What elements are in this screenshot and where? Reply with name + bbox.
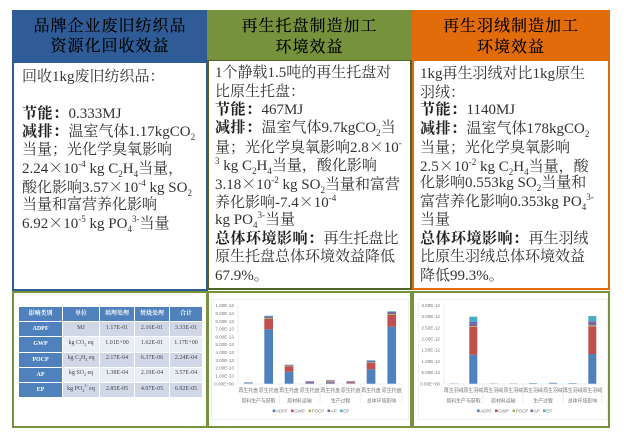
heading: recycled down [412, 10, 610, 60]
chart: recycled pallet stacked bars: 总体环境影响 [367, 398, 396, 404]
table: impact categories: kg C2H4 eq [67, 355, 95, 362]
chart: recycled down stacked bars: 再生羽绒 [563, 387, 583, 394]
chart: recycled down stacked bars: 原料生产与获取 [446, 398, 481, 404]
table: impact categories: MJ [77, 325, 85, 331]
table: impact categories: 6.92E-05 [175, 386, 197, 392]
chart: recycled pallet stacked bars: 再生托盘 [279, 387, 299, 394]
text block: recycled down figures: 节能：1140MJ [420, 102, 515, 118]
text block: textile recycling figures: 回收1kg废旧纺织品： [22, 69, 165, 85]
panel: recycled down benefits [412, 10, 610, 290]
text block: textile recycling figures: 6.92×10-5 kg PO43-当量 [22, 212, 169, 234]
text block: recycled pallet figures: kg PO43-当量 [215, 210, 295, 230]
chart: recycled down stacked bars: 原材料运输 [491, 398, 516, 404]
table: impact categories [19, 307, 202, 397]
chart: recycled down stacked bars: ADPF [480, 408, 492, 414]
table: impact categories: 单位 [75, 311, 87, 317]
text block: recycled down figures [412, 60, 610, 290]
chart: recycled pallet stacked bars: 6.00E-13 [215, 334, 234, 340]
chart: recycled pallet stacked bars: 2.00E-13 [215, 366, 234, 370]
table: impact categories: 2.85E-05 [106, 386, 128, 392]
heading: recycled down: 环境效益 [477, 39, 545, 56]
text block: recycled pallet figures: 节能：467MJ [215, 102, 303, 118]
text block: textile recycling figures [12, 62, 208, 291]
chart: recycled pallet stacked bars: 8.00E-13 [215, 319, 234, 324]
chart: recycled down stacked bars: GWP [498, 408, 509, 414]
text block: recycled down figures: 1kg再生羽绒对比1kg原生 [420, 66, 585, 82]
text block: textile recycling figures: 减排：温室气体1.17kgCO2 [22, 124, 195, 142]
chart: recycled down stacked bars: 3.00E-12 [421, 314, 440, 319]
text block: recycled pallet figures: 3 kg C2H4当量，酸化影响 [215, 156, 377, 176]
table: impact categories: 1.38E-04 [106, 370, 128, 376]
chart: recycled pallet stacked bars: 原材料运输 [287, 398, 312, 404]
panel: impact table frame [12, 291, 208, 428]
text block: textile recycling figures: 当量；光化学臭氧影响 [22, 142, 172, 158]
text block: recycled pallet figures: 总体环境影响：再生托盘比 [215, 231, 399, 247]
text block: recycled pallet figures: 减排：温室气体9.7kgCO2当 [215, 120, 396, 138]
table: impact categories: kg SO2 eq [69, 370, 93, 378]
chart: recycled down stacked bars: 再生羽绒 [444, 387, 464, 394]
table: impact categories: 1.17E+00 [174, 340, 198, 346]
text block: textile recycling figures: 酸化影响3.57×10-4 kg SO2 [22, 176, 192, 198]
text block: recycled down figures: 富营养化影响0.353kg PO43- [420, 192, 594, 212]
table: impact categories: 1.17E-01 [106, 325, 128, 331]
table: impact categories: 1.62E-01 [141, 340, 163, 346]
chart: recycled pallet stacked bars: 原料生产与获取 [241, 398, 276, 404]
text block: recycled down figures: 减排：温室气体178kgCO2 [420, 121, 589, 139]
heading: recycled down: 再生羽绒制造加工 [443, 18, 579, 35]
chart: recycled down stacked bars: 1.50E-12 [421, 348, 440, 353]
chart: recycled pallet stacked bars: 再生托盘 [239, 387, 258, 394]
chart: recycled down stacked bars: 原生羽绒 [464, 387, 483, 394]
chart: recycled down stacked bars: 原生羽绒 [543, 387, 563, 394]
chart: recycled down stacked bars: 3.50E-12 [421, 303, 440, 308]
table: impact categories: kg PO43- eq [67, 383, 95, 393]
text block: recycled pallet figures: 比原生托盘： [215, 84, 305, 100]
chart: recycled pallet stacked bars: ADPF [276, 408, 288, 414]
table: impact categories: GWP [33, 341, 48, 347]
chart: recycled down stacked bars: 2.50E-12 [421, 325, 440, 330]
table: impact categories: ADPF [32, 326, 48, 332]
text block: recycled down figures: 2.5×10-2 kg C2H4当量，酸 [420, 155, 589, 177]
text block: recycled pallet figures: 3.18×10-2 kg SO2当量和富营 [215, 173, 400, 195]
table: impact categories: 填埋处理 [105, 311, 129, 317]
chart: recycled pallet stacked bars: 原生托盘 [382, 387, 402, 394]
panel: recycled pallet benefits [207, 10, 412, 290]
chart: recycled pallet stacked bars: GWP [294, 408, 305, 414]
chart: recycled down stacked bars: 原生羽绒 [504, 387, 523, 394]
chart: recycled pallet stacked bars: 1.00E-12 [215, 303, 234, 308]
table: impact categories: 2.19E-04 [141, 370, 163, 376]
chart: recycled down stacked bars: 2.00E-12 [421, 336, 440, 342]
chart: recycled pallet stacked bars: 4.00E-13 [215, 350, 234, 355]
chart: recycled pallet stacked bars: 再生托盘 [321, 387, 340, 394]
chart: recycled down stacked bars: 0.00E+00 [420, 382, 440, 386]
chart: recycled pallet stacked bars: 1.00E-13 [215, 374, 234, 378]
chart: recycled pallet stacked bars: AP [331, 408, 337, 414]
table: impact categories: AP [36, 372, 44, 378]
table: impact categories: POCP [32, 357, 49, 363]
table: impact categories: 1.01E+00 [105, 340, 129, 346]
chart: recycled down stacked bars: 1.00E-12 [421, 359, 440, 364]
text block: recycled down figures: 总体环境影响：再生羽绒 [420, 231, 589, 247]
chart: recycled down stacked bars: AP [534, 408, 540, 414]
heading: recycled pallet: 环境效益 [275, 39, 344, 56]
chart: recycled down stacked bars: POCP [516, 408, 528, 414]
chart: recycled down stacked bars: EP [546, 408, 552, 414]
chart: recycled pallet stacked bars: 原生托盘 [259, 387, 279, 394]
text block: recycled down figures: 当量；光化学臭氧影响 [420, 140, 570, 156]
text block: recycled pallet figures: 养化影响-7.4×10-4 [215, 191, 336, 212]
table: impact categories: 2.16E-01 [141, 325, 163, 331]
table: impact categories: 3.33E-01 [175, 325, 197, 331]
table: impact categories: 合计 [180, 311, 192, 317]
panel: down chart frame [412, 291, 610, 428]
table: impact categories: 4.07E-05 [141, 386, 163, 392]
chart: recycled pallet stacked bars: 9.00E-13 [215, 311, 234, 316]
table: impact categories: kg CO2 eq [68, 340, 94, 347]
table: impact categories: EP [37, 387, 44, 393]
table: impact categories: 6.37E-06 [141, 355, 163, 361]
chart: recycled pallet stacked bars: 再生托盘 [361, 387, 381, 394]
chart: recycled pallet stacked bars: 3.00E-13 [215, 358, 234, 363]
heading: textile recycling: 资源化回收效益 [50, 38, 170, 55]
heading: recycled pallet [207, 10, 412, 60]
heading: textile recycling [12, 10, 208, 62]
text block: textile recycling figures: 节能：0.333MJ [22, 106, 121, 122]
heading: textile recycling: 品牌企业废旧纺织品 [33, 18, 186, 35]
heading: recycled pallet: 再生托盘制造加工 [241, 18, 378, 35]
text block: textile recycling figures: 2.24×10-4 kg C2H4当量， [22, 157, 183, 179]
chart: recycled pallet stacked bars: EP [343, 408, 349, 414]
chart: recycled down stacked bars: 再生羽绒 [523, 387, 543, 394]
table: impact categories: 2.17E-04 [106, 355, 128, 361]
chart: recycled down stacked bars: 总体环境影响 [568, 398, 597, 404]
text block: recycled pallet figures [207, 60, 412, 290]
chart: recycled pallet stacked bars: POCP [312, 408, 324, 414]
chart: recycled pallet stacked bars: 原生托盘 [341, 387, 361, 394]
chart: recycled down stacked bars: 生产过程 [533, 398, 553, 404]
table: impact categories: 焚烧处理 [140, 311, 164, 317]
chart: recycled pallet stacked bars: 生产过程 [331, 398, 350, 404]
panel: textile recycling benefits [12, 10, 208, 291]
chart: recycled pallet stacked bars: 5.00E-13 [215, 342, 234, 347]
text block: recycled down figures: 降低99.3%。 [420, 268, 504, 284]
table: impact categories: 3.57E-04 [175, 370, 197, 376]
text block: recycled down figures: 化影响0.553kg SO2当量和 [420, 175, 586, 193]
text block: recycled pallet figures: 量；光化学臭氧影响2.8×10- [215, 136, 402, 157]
chart: recycled pallet stacked bars: 原生托盘 [300, 387, 320, 394]
chart: recycled pallet stacked bars: 0.00E+00 [214, 382, 234, 386]
text block: textile recycling figures: 当量和富营养化影响 [22, 197, 157, 213]
panel: pallet chart frame [207, 291, 412, 428]
chart: recycled pallet stacked bars: 7.00E-13 [215, 326, 234, 332]
text block: recycled pallet figures: 67.9%。 [215, 268, 269, 284]
table: impact categories: 2.24E-04 [175, 355, 197, 361]
text block: recycled down figures: 比原生羽绒总体环境效益 [420, 249, 585, 265]
text block: recycled down figures: 羽绒： [420, 85, 465, 101]
table: impact categories: 影响类别 [28, 311, 52, 317]
text block: recycled pallet figures: 原生托盘总体环境效益降低 [215, 249, 395, 265]
text block: recycled down figures: 当量 [420, 212, 450, 228]
text block: recycled pallet figures: 1个静载1.5吨的再生托盘对 [215, 65, 391, 81]
chart: recycled down stacked bars: 原生羽绒 [583, 387, 602, 394]
chart: recycled down stacked bars: 再生羽绒 [484, 387, 503, 394]
chart: recycled down stacked bars: 5.00E-13 [421, 370, 440, 375]
